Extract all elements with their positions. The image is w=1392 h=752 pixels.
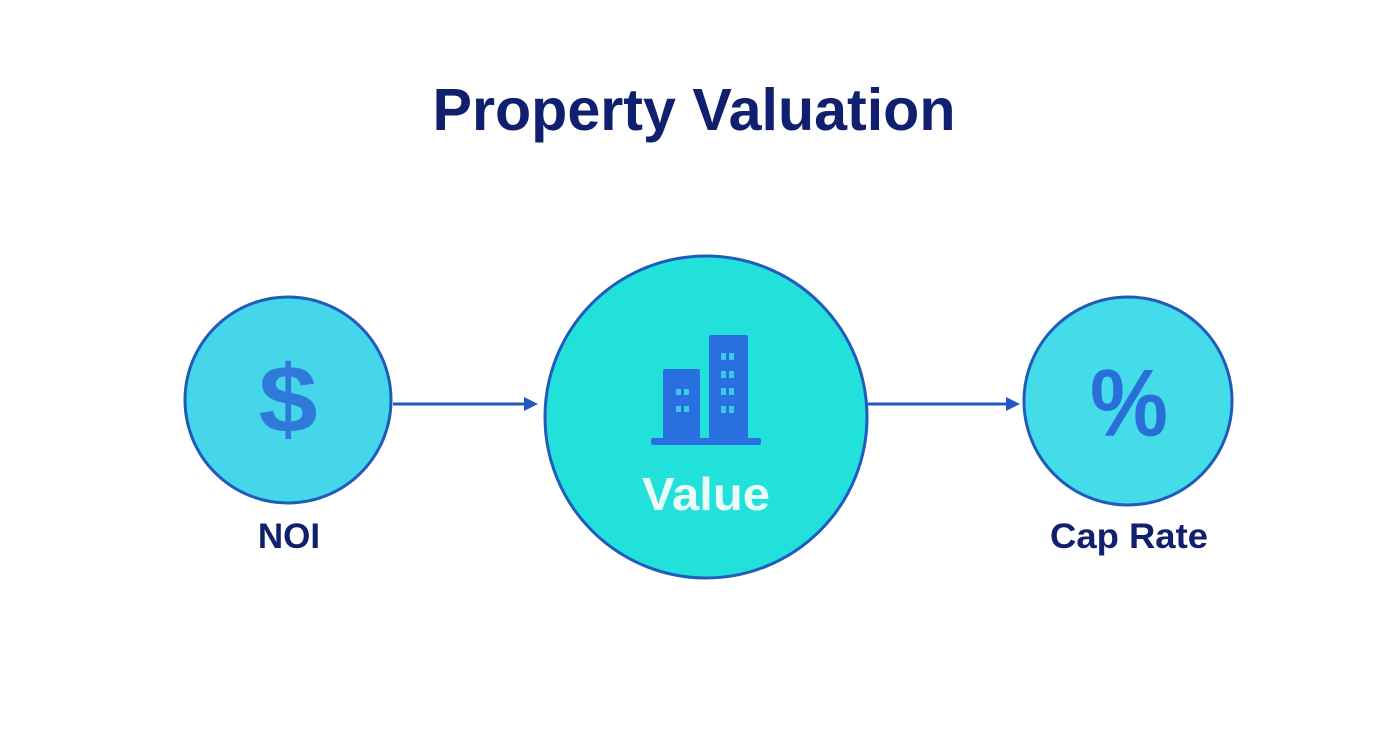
title: Property Valuation	[432, 77, 956, 143]
arrow: Value to Cap Rate	[868, 397, 1020, 411]
icon: percent sign: %	[1090, 350, 1168, 457]
label: Value: Value	[642, 468, 770, 520]
icon: buildings	[651, 335, 761, 445]
label: Cap Rate: Cap Rate	[1050, 517, 1208, 556]
icon: dollar sign: $	[258, 346, 318, 453]
panel: Value circle	[545, 256, 867, 578]
panel: NOI circle	[185, 297, 391, 503]
arrow: NOI to Value	[393, 397, 538, 411]
panel: Cap Rate circle	[1024, 297, 1232, 505]
label: NOI: NOI	[258, 517, 320, 556]
